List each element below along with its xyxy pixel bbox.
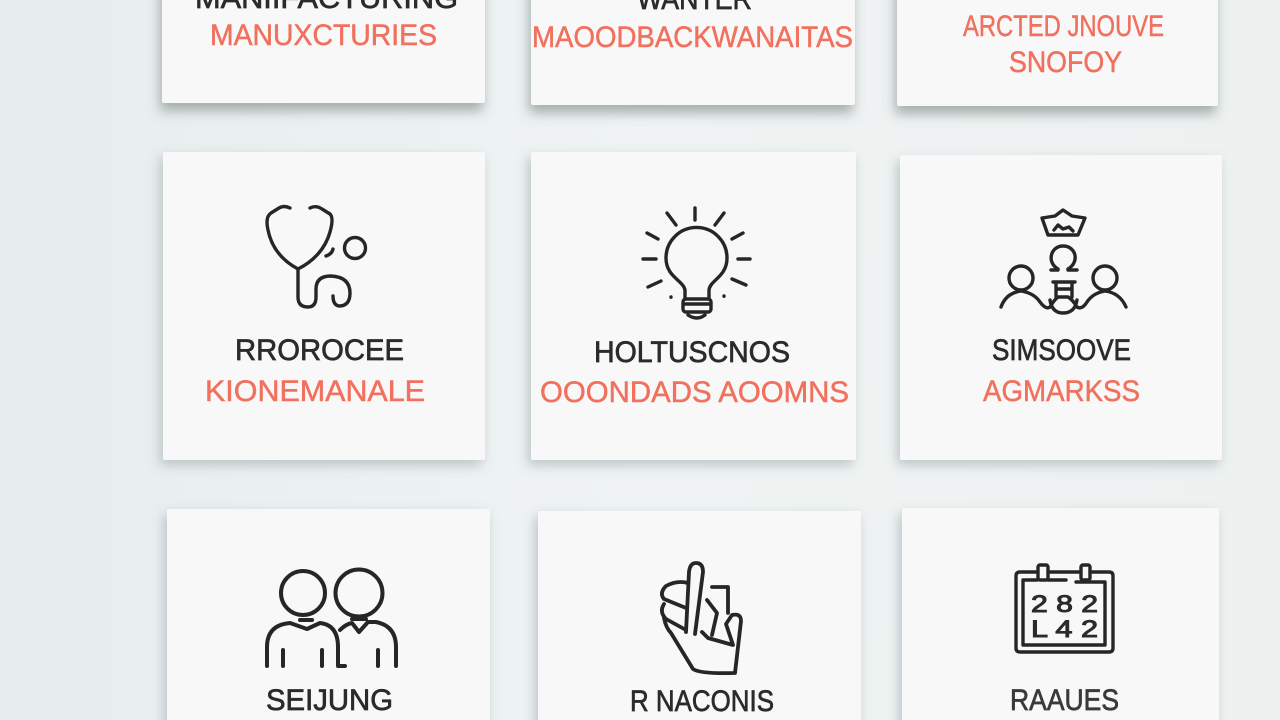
calendar numerals second row: L 4 2 <box>1031 616 1098 643</box>
calendar numerals: 2 8 2 <box>1031 591 1098 618</box>
heading: light bulb card: HOLTUSCNOS <box>594 336 790 369</box>
subheading: light bulb card: OOONDADS AOOMNS <box>540 376 849 409</box>
icon: light bulb <box>643 208 750 318</box>
card: stethoscope <box>163 152 485 460</box>
subheading: arcted line two: SNOFOY <box>1009 46 1122 79</box>
icon: calendar <box>1016 565 1113 652</box>
heading: hand card: R NACONIS <box>630 685 774 718</box>
card: group <box>900 155 1222 460</box>
card: two people <box>167 509 490 720</box>
icon: stethoscope <box>267 206 366 307</box>
subheading: group card: AGMARKSS <box>983 375 1140 408</box>
card: manufacturing <box>162 0 485 103</box>
subheading: manufacturing: MANUXCTURIES <box>210 19 437 52</box>
card: calendar <box>902 508 1219 720</box>
heading: group card: SIMSOOVE <box>992 334 1131 367</box>
card: arcted <box>897 0 1218 106</box>
card: light bulb <box>531 152 856 460</box>
icon: group of people with crown <box>1001 210 1126 313</box>
card: hand <box>538 511 861 720</box>
icon: hand <box>662 563 741 673</box>
heading: calendar card: RAAUES <box>1010 684 1119 717</box>
card: wanter <box>531 0 855 105</box>
subheading: arcted line one: ARCTED JNOUVE <box>963 10 1164 43</box>
subheading: stethoscope card: KIONEMANALE <box>205 375 425 408</box>
subheading: wanter: MAOODBACKWANAITAS <box>532 21 853 54</box>
icon: two people <box>267 570 396 666</box>
heading: two people card: SEIJUNG <box>266 684 393 717</box>
heading: stethoscope card: RROROCEE <box>235 334 404 367</box>
